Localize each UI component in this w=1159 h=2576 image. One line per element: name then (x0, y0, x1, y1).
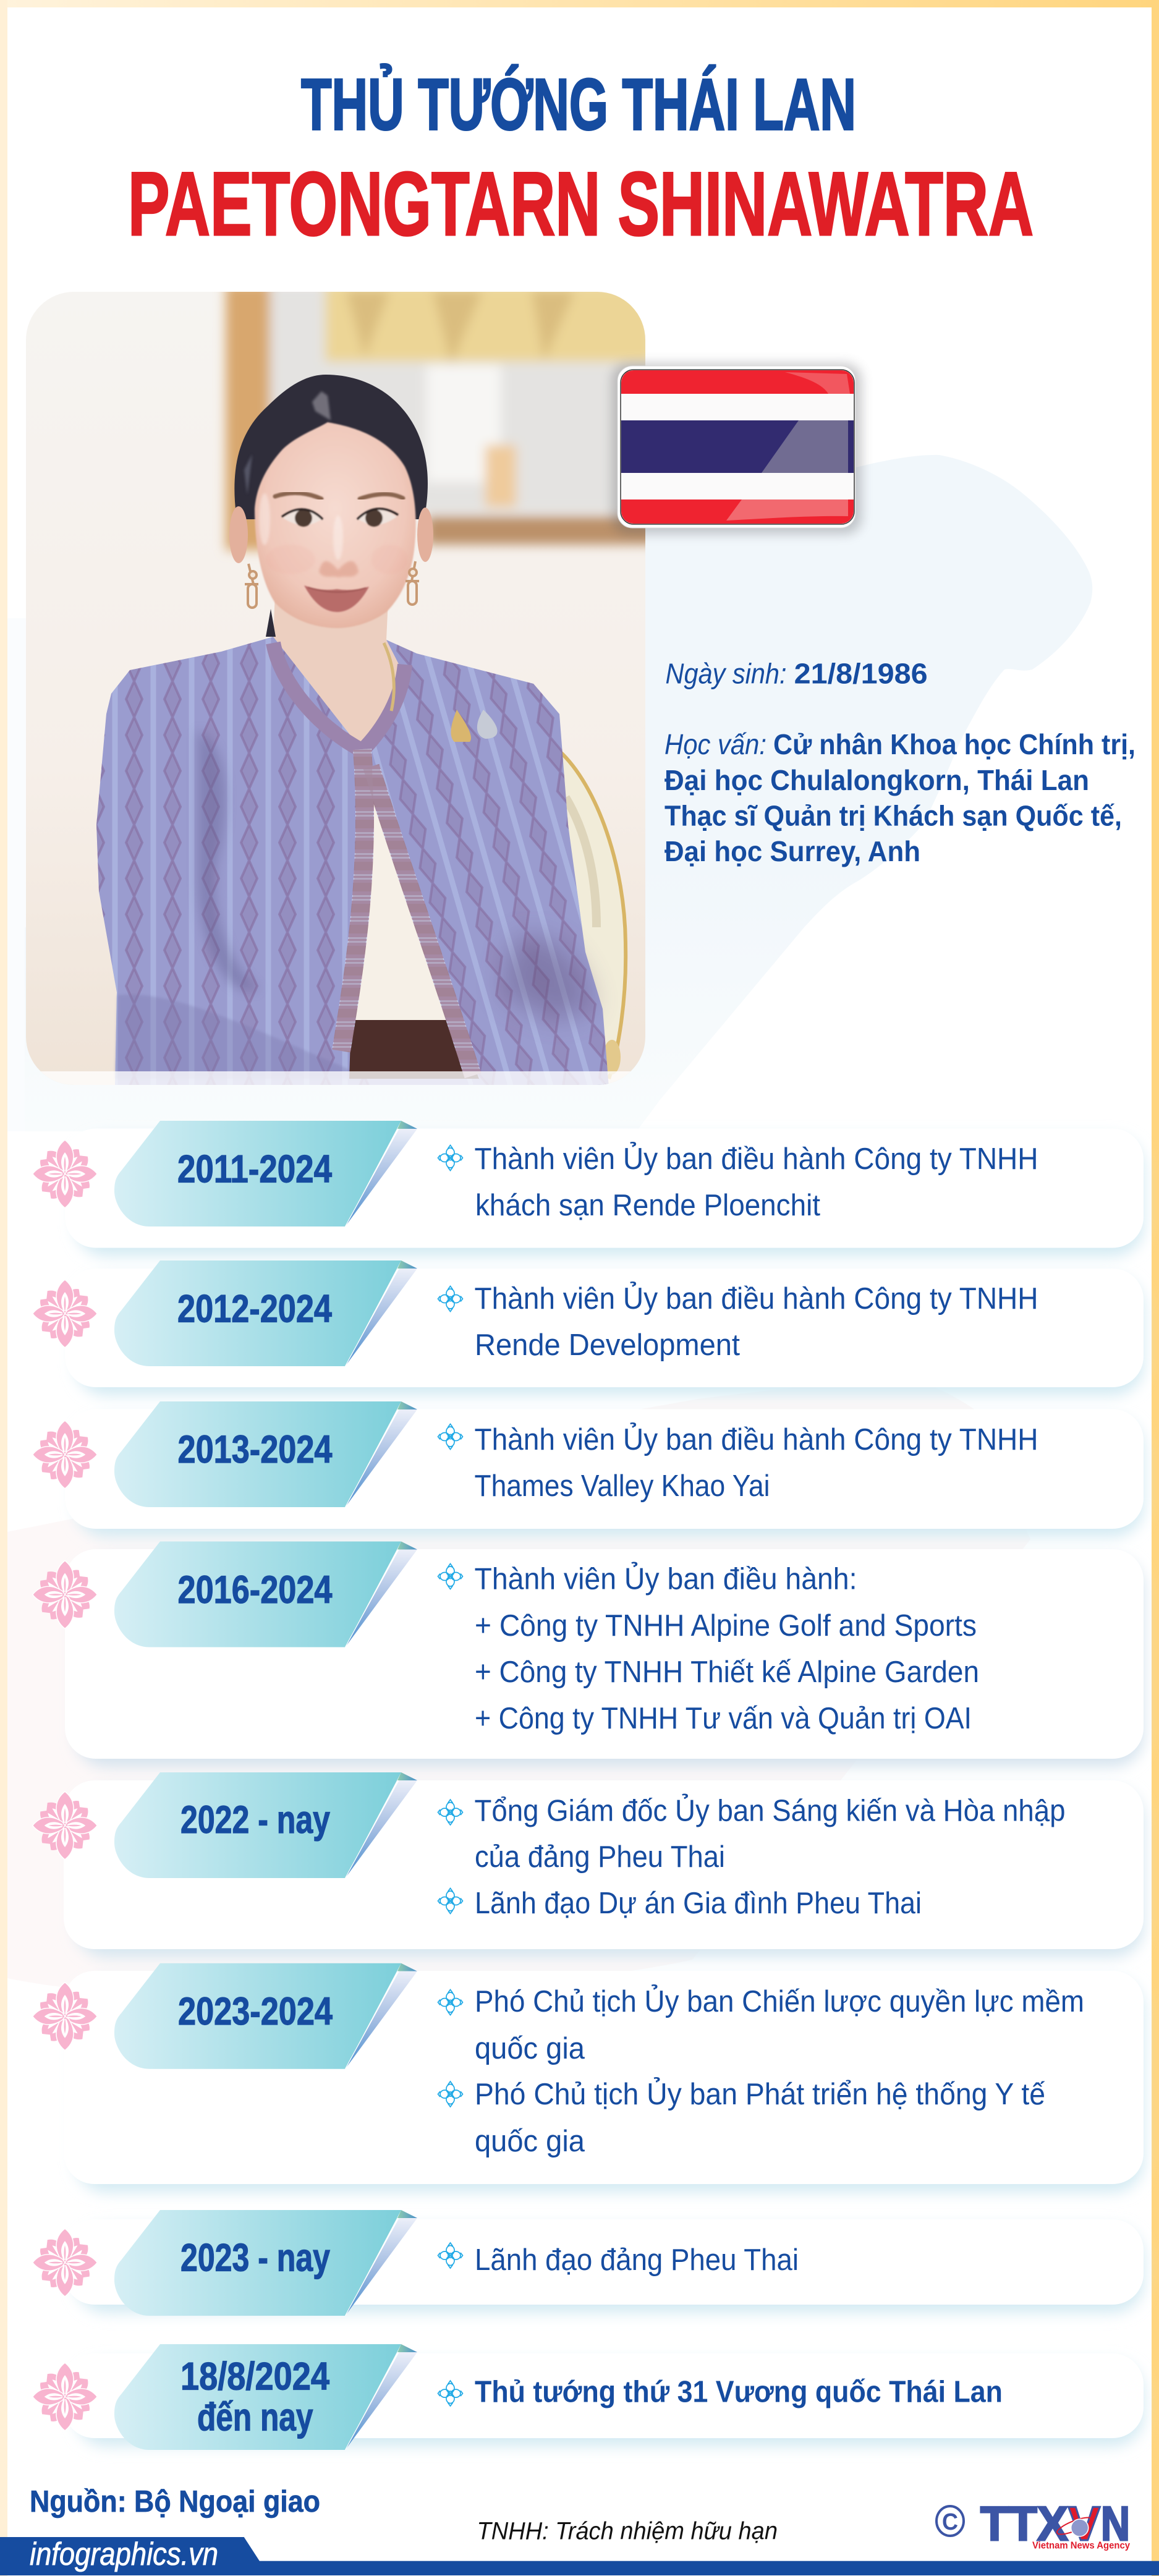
card (65, 1129, 1144, 1248)
bullet icon (438, 1145, 462, 1171)
date ribbon (114, 1121, 417, 1226)
left border strip (0, 0, 7, 2576)
trousers (349, 1020, 479, 1079)
background blob: pale left wash (7, 618, 32, 1131)
date: 2016-2024 (178, 1568, 333, 1612)
face (255, 422, 416, 628)
date of birth: Ngày sinh: (665, 658, 786, 690)
description: Lãnh đạo Dự án Gia đình Pheu Thai (475, 1887, 922, 1920)
date ribbon (114, 1772, 417, 1878)
education: Học vấn: (664, 728, 766, 760)
date: 18/8/2024 (180, 2355, 329, 2399)
flower icon (33, 1983, 97, 2051)
description (475, 1422, 1038, 1503)
date ribbon (114, 1542, 417, 1647)
bullet icon (438, 1564, 462, 1589)
globe (1055, 2514, 1093, 2538)
logo letters: V (1068, 2496, 1100, 2551)
copyright mark (936, 2506, 964, 2536)
date ribbon (114, 1963, 417, 2069)
timeline row 2012-2024 (33, 1260, 1144, 1395)
description: Thành viên Ủy ban điều hành Công ty TNHH (475, 1282, 1038, 1316)
flag stripes (621, 370, 854, 524)
description (475, 1282, 1038, 1362)
card (64, 2353, 1144, 2438)
photo bottom fade (26, 1071, 645, 1085)
education: Cử nhân Khoa học Chính trị, (773, 728, 1136, 760)
description (475, 1984, 1084, 2065)
description: Thames Valley Khao Yai (475, 1469, 770, 1503)
description (475, 2077, 1045, 2158)
description: Lãnh đạo đảng Pheu Thai (475, 2243, 799, 2277)
bullet icon (438, 2381, 462, 2406)
flower icon (33, 1792, 97, 1860)
necklace (384, 643, 394, 711)
date ribbon (114, 2344, 417, 2450)
facial highlights (259, 493, 408, 574)
background blob: pale pink (7, 1375, 1030, 1997)
lapel pins (451, 710, 498, 742)
flower icon (33, 1280, 97, 1348)
date ribbon (114, 1260, 417, 1366)
jacket (96, 637, 609, 1088)
description: Thủ tướng thứ 31 Vương quốc Thái Lan (475, 2376, 1003, 2409)
card (65, 1269, 1144, 1387)
bullet icon (438, 2243, 462, 2268)
copyright mark: C (942, 2509, 958, 2535)
date: 2013-2024 (178, 1428, 333, 1471)
date: 2011-2024 (177, 1147, 332, 1191)
timeline row 2016-2024 (33, 1542, 1144, 1767)
bullet icon (438, 2081, 462, 2107)
description: Thành viên Ủy ban điều hành: (475, 1562, 857, 1596)
website tab: infographics.vn (30, 2536, 218, 2572)
logo: TTXVN (936, 2496, 1130, 2551)
date of birth (665, 658, 928, 690)
date of birth: 21/8/1986 (794, 658, 928, 690)
description (475, 1794, 1066, 1874)
card (64, 1780, 1144, 1949)
background blob: pale blue (25, 455, 1092, 1131)
timeline row 2023 - nay (33, 2210, 1144, 2316)
logo letters: TTX (980, 2496, 1068, 2551)
timeline row 2011-2024 (33, 1121, 1144, 1256)
top border strip (0, 0, 1159, 7)
description: Rende Development (475, 1328, 740, 1362)
bullet icon (438, 1989, 462, 2015)
description: + Công ty TNHH Tư vấn và Quản trị OAI (475, 1702, 972, 1735)
ears (229, 506, 433, 563)
description: Tổng Giám đốc Ủy ban Sáng kiến và Hòa nhập (475, 1794, 1066, 1828)
hair (234, 375, 428, 519)
title (128, 63, 1034, 254)
flower icon (33, 1140, 97, 1208)
flower icon (33, 1421, 97, 1489)
timeline row 2022 - nay (33, 1772, 1144, 1957)
education: Thạc sĩ Quản trị Khách sạn Quốc tế, (664, 800, 1122, 832)
card (65, 1549, 1144, 1759)
personal information (664, 658, 1136, 867)
description: Phó Chủ tịch Ủy ban Phát triển hệ thống Y tế (475, 2077, 1045, 2111)
bullet icon (438, 1424, 462, 1449)
date ribbon (114, 1401, 417, 1507)
bullet icon (438, 1286, 462, 1312)
card (65, 1409, 1144, 1529)
date ribbon (114, 2210, 417, 2316)
flag shadow (612, 363, 862, 534)
flower icon (33, 2363, 97, 2431)
description: quốc gia (475, 2032, 585, 2065)
description: khách sạn Rende Ploenchit (475, 1189, 820, 1222)
neck and chest (273, 601, 399, 741)
timeline row 18/8/2024 (33, 2344, 1144, 2450)
eyes (282, 509, 398, 527)
card (64, 2219, 1144, 2305)
earrings (245, 561, 419, 608)
education (664, 728, 1136, 867)
description: Phó Chủ tịch Ủy ban Chiến lược quyền lực mềm (475, 1984, 1084, 2018)
agency name: Vietnam News Agency (1032, 2541, 1130, 2551)
right border strip (1152, 0, 1159, 2576)
flag frame (618, 366, 855, 528)
title line 1: THỦ TƯỚNG THÁI LAN (301, 63, 856, 146)
flower icon (33, 1560, 97, 1628)
bottom bar (0, 2561, 1159, 2575)
collar and trim (273, 643, 473, 1076)
date: đến nay (197, 2396, 313, 2439)
card (64, 1971, 1144, 2184)
abbreviation note: TNHH: Trách nhiệm hữu hạn (477, 2518, 778, 2545)
description: Thành viên Ủy ban điều hành Công ty TNHH (475, 1142, 1038, 1176)
date (180, 2355, 329, 2439)
bullet icon (438, 1800, 462, 1825)
timeline row 2013-2024 (33, 1401, 1144, 1537)
flower icon (33, 2229, 97, 2297)
eyebrows (275, 493, 403, 499)
description: Thành viên Ủy ban điều hành Công ty TNHH (475, 1422, 1038, 1456)
description: của đảng Pheu Thai (475, 1840, 725, 1874)
blouse (355, 804, 446, 1020)
education: Đại học Chulalongkorn, Thái Lan (664, 764, 1089, 796)
mouth (304, 585, 369, 612)
description: + Công ty TNHH Alpine Golf and Sports (475, 1609, 977, 1643)
description (475, 1142, 1038, 1222)
date: 2012-2024 (177, 1287, 332, 1330)
logo letters: N (1101, 2496, 1130, 2551)
bullet icon (438, 1888, 462, 1914)
education: Đại học Surrey, Anh (664, 835, 920, 867)
chair back (556, 751, 626, 1079)
source: Nguồn: Bộ Ngoại giao (30, 2485, 320, 2519)
logo letters (980, 2496, 1130, 2551)
description: + Công ty TNHH Thiết kế Alpine Garden (475, 1656, 979, 1689)
nose (319, 561, 359, 577)
portrait photo (26, 284, 655, 1088)
description: quốc gia (475, 2125, 585, 2158)
date: 2022 - nay (180, 1798, 330, 1842)
timeline row 2023-2024 (33, 1963, 1144, 2192)
date: 2023-2024 (178, 1990, 333, 2033)
description (475, 1562, 979, 1735)
date: 2023 - nay (180, 2237, 330, 2280)
Thai flag (612, 363, 862, 534)
